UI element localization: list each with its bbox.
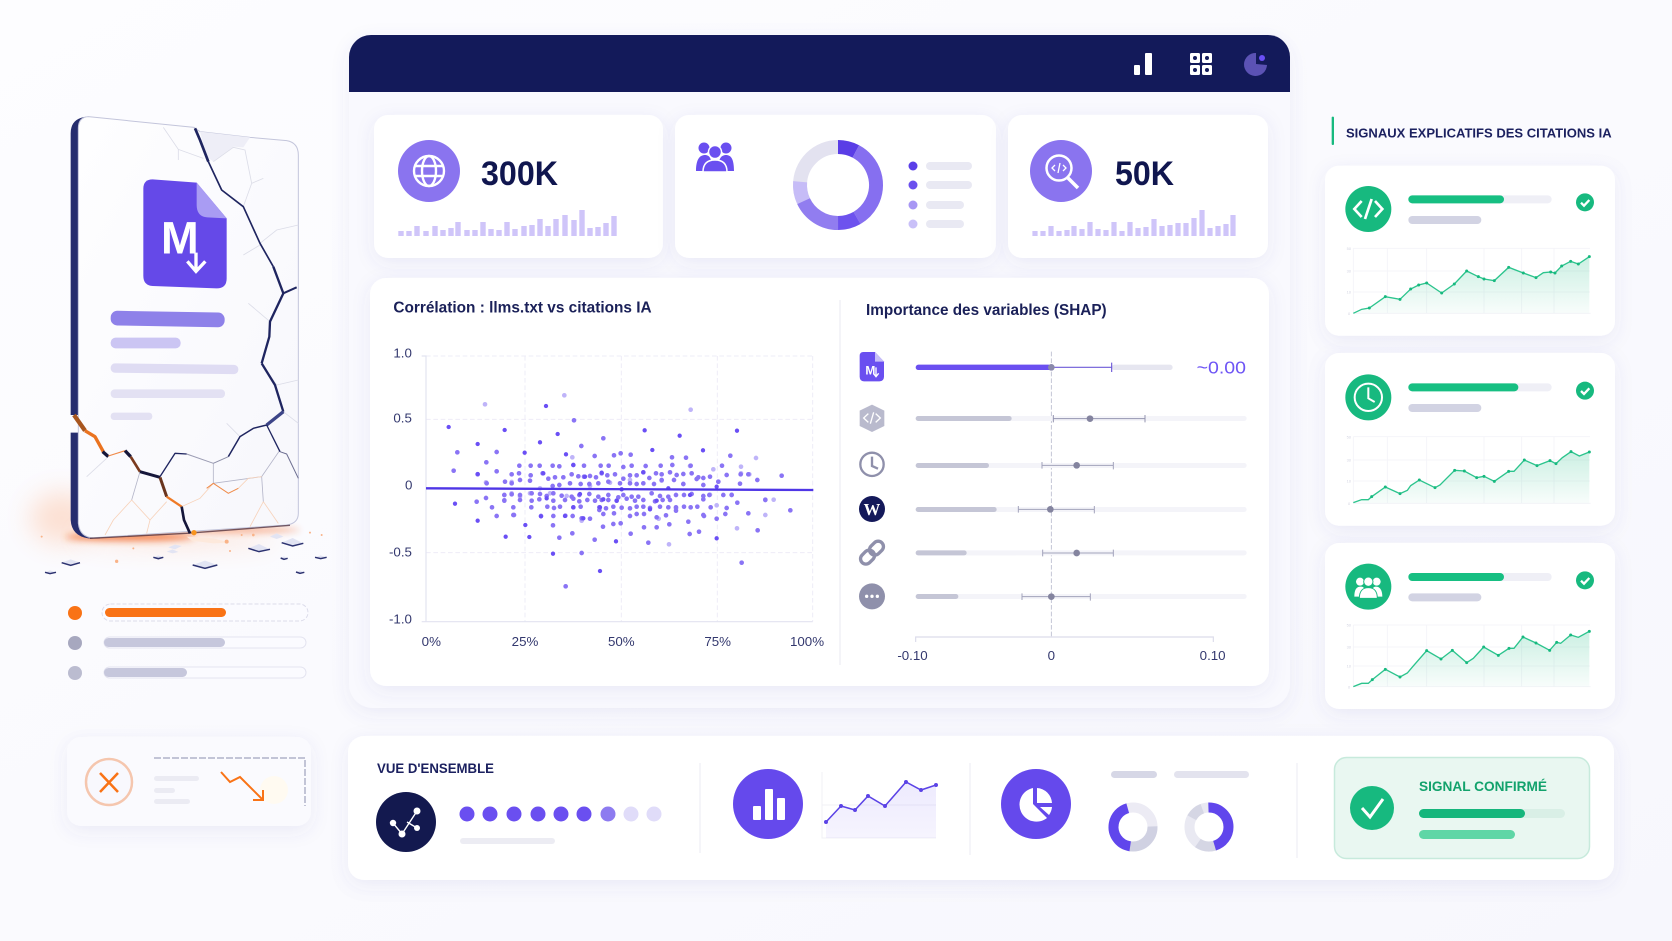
line chart: 50 — [1347, 623, 1352, 628]
panel: signal card audience — [1325, 543, 1615, 709]
icon: bar chart — [733, 769, 803, 839]
progress rows (left) — [68, 604, 308, 680]
icon: code search — [1030, 140, 1092, 202]
line chart — [1347, 246, 1591, 316]
row: time — [860, 453, 1247, 476]
donut: left — [1110, 804, 1156, 850]
KPI card: 300K: 300K — [481, 155, 558, 193]
scatter chart: correlation: 1.0 — [393, 345, 412, 360]
icon: markdown file — [143, 179, 227, 288]
panel: charts — [370, 278, 1269, 686]
panel: signal card code — [1325, 166, 1615, 336]
icon: clock — [1345, 374, 1391, 420]
row: other — [859, 583, 1247, 609]
SHAP importance chart: -0.10 — [897, 648, 928, 663]
sparkline bars — [1035, 210, 1233, 236]
icon: failure cross — [86, 759, 132, 805]
progress dots — [460, 806, 662, 822]
icon: pie — [1244, 53, 1267, 76]
heading: overview: VUE D'ENSEMBLE — [377, 760, 494, 776]
icon: users — [1345, 564, 1391, 610]
line chart: 10 — [1347, 289, 1352, 294]
icon: globe — [398, 140, 460, 202]
thin cracks — [87, 127, 298, 502]
line chart: 10 — [1347, 479, 1352, 484]
mini line chart — [822, 772, 936, 838]
header bar — [349, 35, 1290, 92]
scatter chart: correlation: 50% — [608, 634, 635, 649]
scatter chart: correlation — [389, 300, 824, 649]
panel: overview — [348, 736, 1614, 880]
scatter chart: correlation: Corrélation : llms.txt vs citations IA — [393, 300, 652, 317]
donut: right — [1182, 800, 1236, 854]
icon: network — [376, 792, 436, 852]
scatter chart: correlation: -1.0 — [389, 611, 412, 626]
trend line — [426, 488, 813, 490]
scatter chart: correlation: 0 — [405, 477, 412, 492]
row: wikipedia: W — [864, 500, 881, 519]
icon: grid — [1190, 53, 1212, 75]
panel: failure card — [67, 737, 311, 826]
row: links — [858, 539, 1247, 566]
panel: main dashboard — [349, 35, 1290, 708]
scatter chart: correlation: -0.5 — [389, 545, 412, 560]
icon: check — [1576, 382, 1594, 400]
icon: falling arrow — [221, 772, 263, 800]
sparkline bars — [401, 210, 614, 236]
KPI card: 50K — [1008, 115, 1268, 258]
scatter points — [449, 395, 790, 586]
line chart — [1347, 623, 1591, 689]
icon: check — [1576, 193, 1594, 211]
line chart: 50 — [1347, 246, 1352, 251]
KPI card: 50K: 50K — [1115, 155, 1174, 193]
scatter chart: correlation: 100% — [790, 634, 824, 649]
line chart — [1347, 434, 1591, 506]
main dark crack — [160, 128, 298, 478]
icon: pie chart — [1001, 769, 1071, 839]
icon: bars — [1134, 53, 1152, 75]
KPI card: 300K — [374, 115, 663, 258]
row: markdown: M — [865, 364, 875, 378]
icon: check — [1576, 571, 1594, 589]
icon: code — [1345, 186, 1391, 232]
line chart: 30 — [1347, 645, 1352, 650]
illustration: cracked markdown document — [30, 117, 327, 574]
line chart: 10 — [1347, 664, 1352, 669]
torn corner — [200, 132, 250, 162]
donut chart — [786, 133, 890, 237]
orange hairline cracks — [105, 477, 278, 535]
SHAP importance chart: 0.10 — [1200, 648, 1226, 663]
callout: confirmed signal — [1334, 758, 1590, 858]
panel: signal card time — [1325, 353, 1615, 526]
legend pills — [1111, 771, 1249, 778]
row: markdown — [860, 352, 1246, 381]
SHAP importance chart: Importance des variables (SHAP) — [866, 302, 1107, 319]
line chart: 30 — [1347, 269, 1352, 274]
line chart: 50 — [1347, 434, 1352, 439]
debris — [41, 530, 327, 574]
icon: users — [696, 142, 734, 172]
heading: explanatory signals: SIGNAUX EXPLICATIFS DES CITATIONS IA — [1346, 125, 1612, 140]
KPI card: audience donut — [675, 115, 996, 258]
line chart: 0 — [1348, 501, 1351, 506]
SHAP importance chart — [858, 302, 1247, 663]
callout: confirmed signal: SIGNAL CONFIRMÉ — [1419, 778, 1547, 794]
scatter chart: correlation: 0% — [422, 634, 441, 649]
line chart: 0 — [1348, 684, 1351, 689]
legend — [908, 162, 972, 228]
line chart: 0 — [1348, 311, 1351, 316]
document text lines — [111, 311, 238, 420]
row: code — [860, 405, 1247, 432]
row: markdown: ~0.00 — [1197, 357, 1246, 377]
scatter chart: correlation: 75% — [704, 634, 731, 649]
glowing orange crack — [74, 415, 190, 533]
icon: confirmed check — [1350, 786, 1394, 830]
SHAP importance chart: 0 — [1048, 648, 1055, 663]
row: wikipedia — [859, 496, 1247, 522]
scatter chart: correlation: 25% — [512, 634, 538, 649]
scatter chart: correlation: 0.5 — [393, 411, 412, 426]
line chart: 30 — [1347, 458, 1352, 463]
icon: markdown file: M — [161, 212, 199, 263]
